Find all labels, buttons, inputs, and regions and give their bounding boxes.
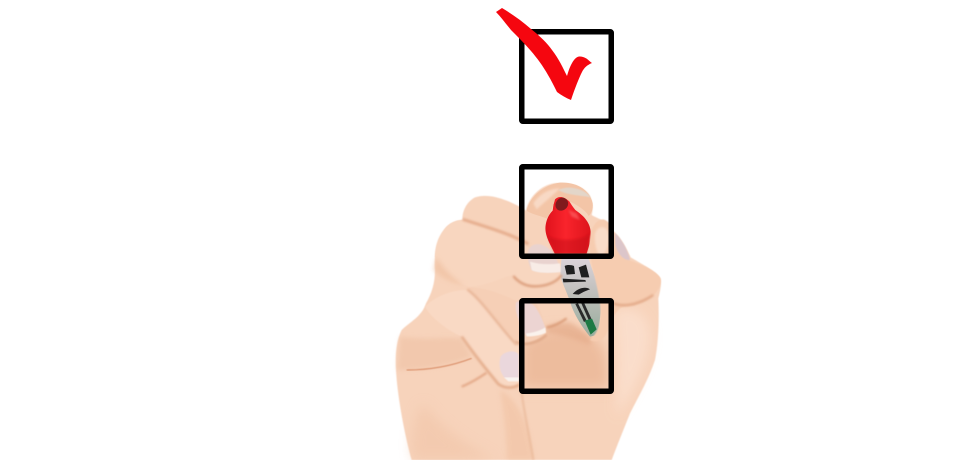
- icon: red check mark: [496, 8, 592, 100]
- pinky finger and nail: [397, 289, 520, 388]
- marker barrel: [560, 257, 601, 337]
- checkbox 1: [522, 32, 611, 121]
- index fingertip and nail: [527, 183, 593, 218]
- marker cap: [545, 196, 591, 253]
- checkbox 3: [522, 301, 611, 391]
- checkbox 2: [522, 167, 611, 256]
- middle finger and nail: [433, 219, 562, 287]
- thumb: [590, 219, 661, 341]
- hand silhouette: [396, 183, 661, 460]
- ring finger and nail: [468, 287, 547, 344]
- palm shading: [522, 329, 609, 388]
- palm creases: [407, 318, 567, 460]
- hand: [396, 183, 661, 460]
